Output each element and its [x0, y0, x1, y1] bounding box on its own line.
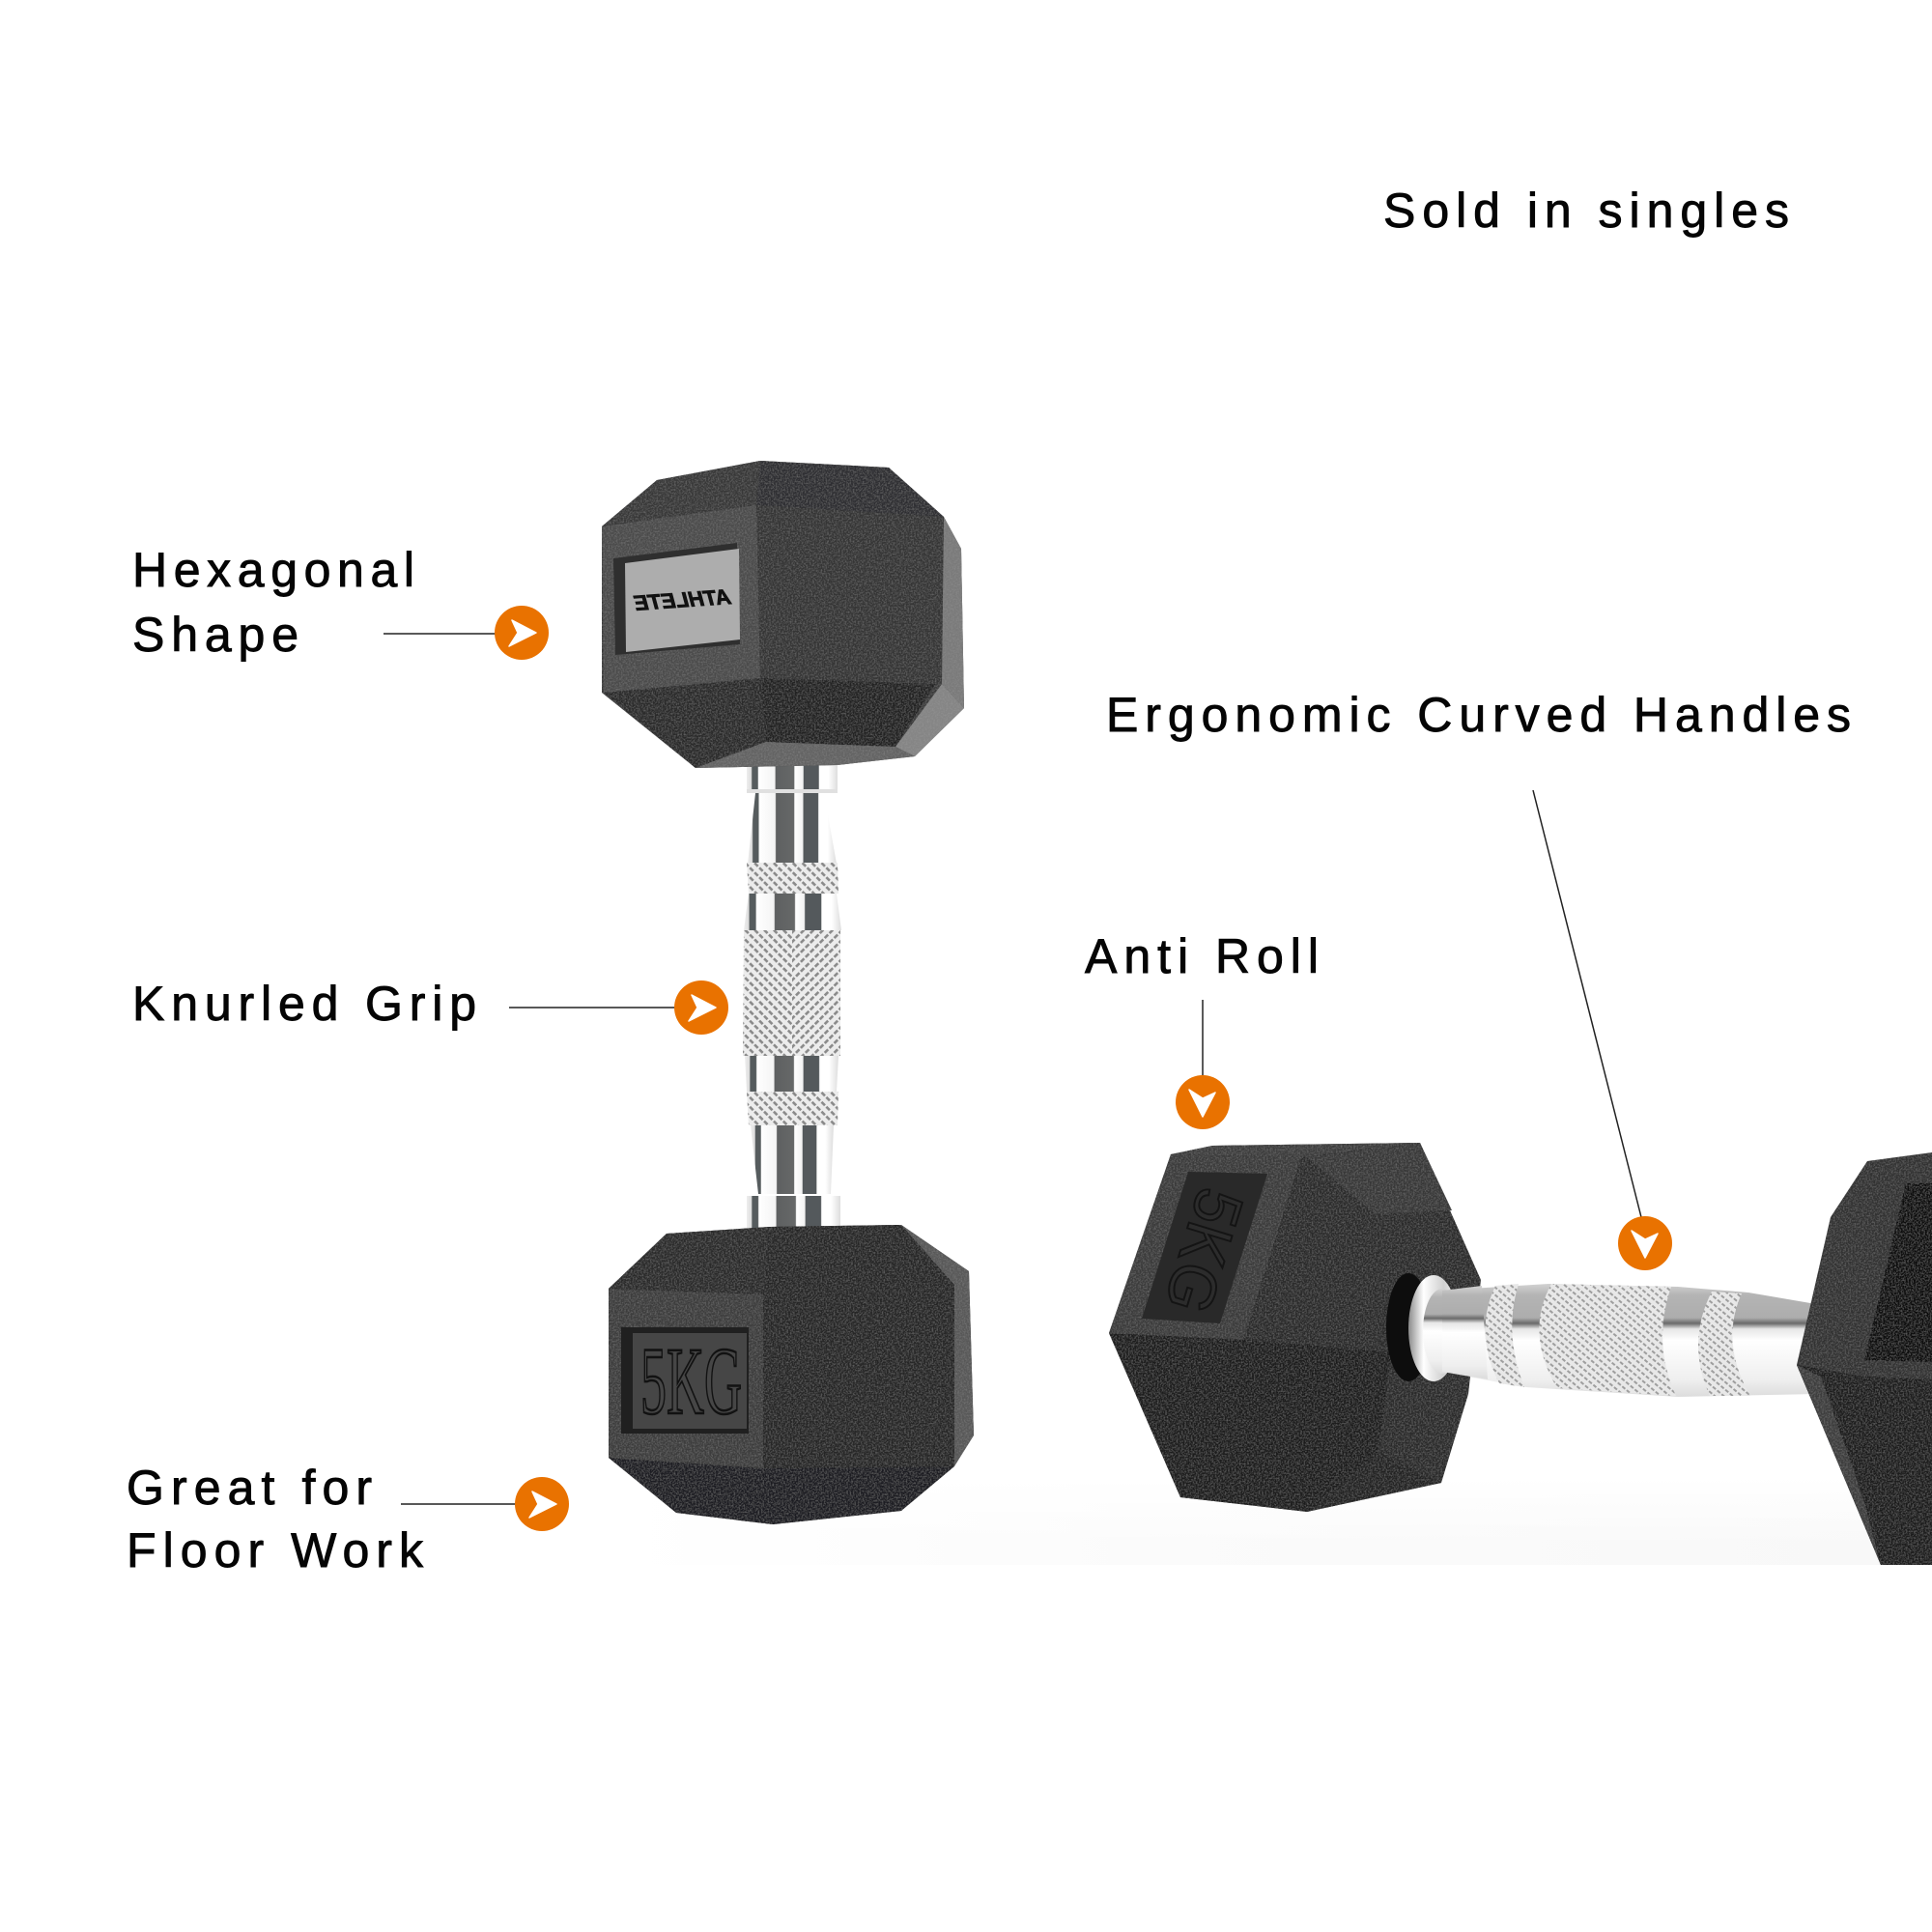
label: Shape [132, 608, 298, 662]
callout: hexagonal shape [132, 543, 549, 662]
bottom hexagonal head [609, 1225, 974, 1524]
icon: orange arrow [495, 606, 549, 660]
handle: lying chrome bar [1439, 1284, 1816, 1397]
leader line [509, 1007, 676, 1009]
bottom head 5KG plate [621, 1327, 749, 1435]
left hexagonal head [1109, 1143, 1481, 1512]
leader line [1533, 790, 1641, 1217]
top head logo plate: ATHLETE [633, 584, 732, 615]
handle: standing chrome bar [743, 756, 841, 1229]
leader line [384, 633, 497, 635]
label: Anti Roll [1085, 929, 1319, 983]
icon: orange arrow [1176, 1075, 1230, 1129]
label: Floor Work [127, 1523, 424, 1577]
label: Great for [127, 1461, 372, 1515]
handle collar ring [1386, 1273, 1462, 1381]
callout: anti roll [1085, 929, 1319, 1129]
top head logo plate [613, 543, 740, 655]
callout: great for floor work [127, 1461, 569, 1577]
icon: orange arrow [1618, 1216, 1672, 1270]
title note: Sold in singles [1383, 184, 1789, 238]
callout: ergonomic curved handles [1106, 688, 1851, 1270]
dumbbell: lying on floor [1109, 1143, 1816, 1512]
left head 5KG plate: 5KG [1151, 1180, 1257, 1321]
top hexagonal head [602, 461, 964, 768]
leader line [1202, 1000, 1204, 1076]
dumbbell: far head cropped at right [1797, 1152, 1932, 1565]
icon: orange arrow [515, 1477, 569, 1531]
floor shadow [618, 1478, 1932, 1565]
label: Knurled Grip [132, 977, 476, 1031]
icon: orange arrow [674, 980, 728, 1035]
dumbbell: standing [602, 461, 974, 1524]
label: Ergonomic Curved Handles [1106, 688, 1851, 742]
label: Hexagonal [132, 543, 414, 597]
bottom head 5KG plate: 5KG [640, 1327, 742, 1435]
callout: knurled grip [132, 977, 728, 1035]
leader line [401, 1503, 517, 1505]
handle base [1442, 1286, 1488, 1379]
